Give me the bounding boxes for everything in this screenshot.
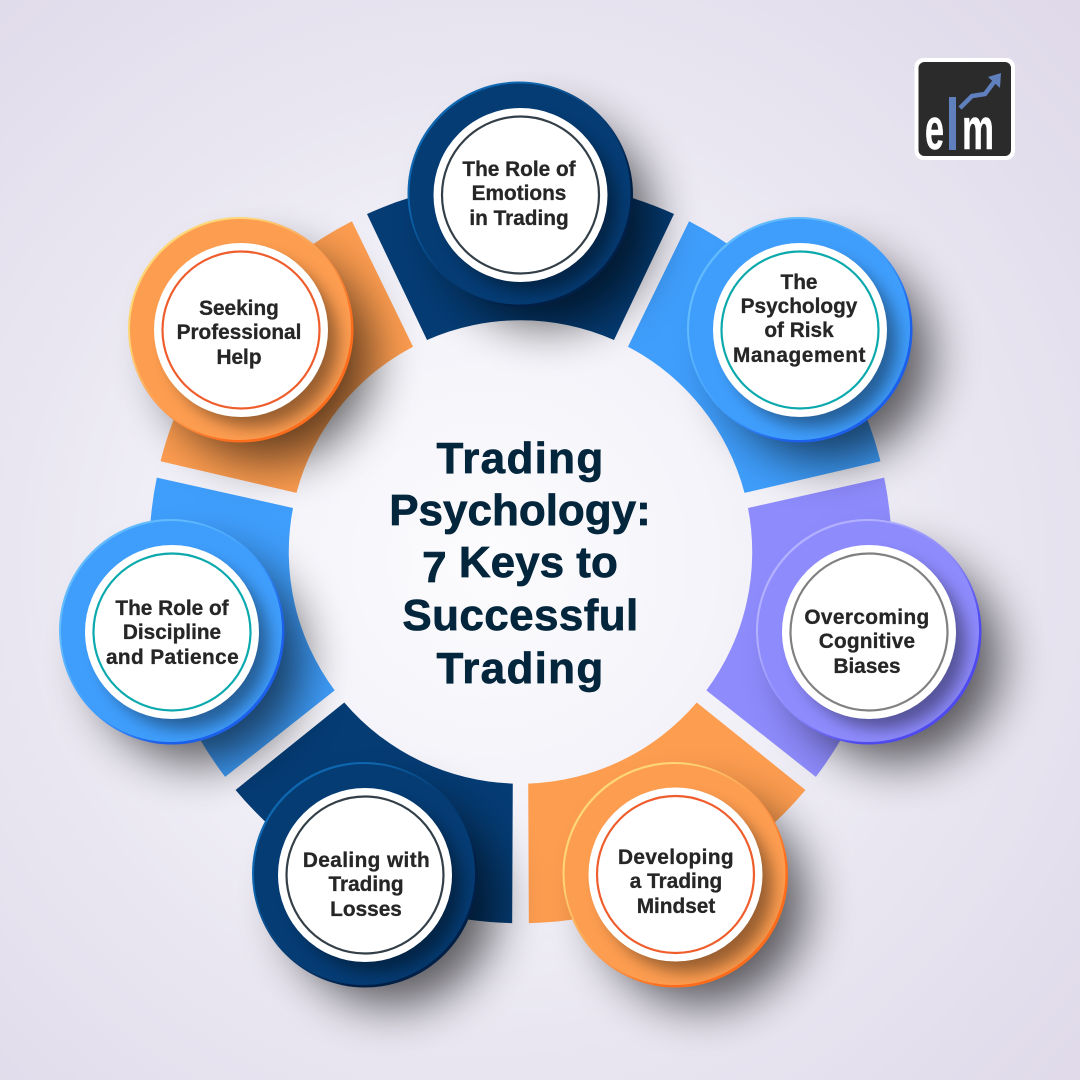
bubble: The Role of Emotions in Trading <box>408 82 633 307</box>
label: Professional <box>177 321 301 344</box>
segment: role of emotions <box>367 181 674 340</box>
label: Losses <box>330 898 402 921</box>
segment: trading losses <box>221 676 567 953</box>
title: Trading <box>436 644 604 693</box>
bubble: Overcoming Cognitive Biases <box>756 519 982 744</box>
label: a Trading <box>630 870 722 893</box>
label: Overcoming <box>804 606 930 629</box>
logo bar l <box>949 97 956 150</box>
label: Emotions <box>472 182 566 205</box>
segment: discipline and patience <box>124 450 348 784</box>
label: Psychology <box>741 295 858 318</box>
label: Trading <box>328 873 404 896</box>
label: Seeking <box>199 297 279 320</box>
label: of Risk <box>764 319 834 342</box>
label: in Trading <box>469 207 569 230</box>
segment: cognitive biases <box>693 450 917 784</box>
title: Trading <box>436 434 604 483</box>
title: Psychology: <box>389 486 651 535</box>
segment: professional help <box>135 201 450 540</box>
title: 7 <box>422 543 447 592</box>
logo letter e: e <box>925 97 944 162</box>
title: Keys to <box>447 538 618 587</box>
label: Biases <box>833 655 901 678</box>
bubble: The Psychology of Risk Management <box>687 217 912 442</box>
segmented ring <box>124 181 917 953</box>
logo: elm <box>914 58 1015 162</box>
label: Management <box>733 344 866 367</box>
label: and Patience <box>106 646 239 669</box>
bubble: Developing a Trading Mindset <box>562 762 788 988</box>
logo letter m: m <box>962 97 994 162</box>
bubble: Seeking Professional Help <box>128 217 354 442</box>
label: Mindset <box>637 895 715 918</box>
bubble shadows <box>95 117 1000 1006</box>
label: Developing <box>618 846 734 869</box>
label: The <box>781 271 817 294</box>
label: Discipline <box>123 621 221 644</box>
bubble: The Role of Discipline and Patience <box>59 519 284 744</box>
bubble: Dealing with Trading Losses <box>252 762 478 988</box>
title: Successful <box>402 591 639 640</box>
label: The Role of <box>462 158 576 181</box>
label: Cognitive <box>819 630 915 653</box>
label: The Role of <box>115 597 229 620</box>
label: Help <box>216 346 262 369</box>
logo arrow <box>960 73 1001 108</box>
label: Dealing with <box>303 849 430 872</box>
segment: trading mindset <box>474 676 820 953</box>
segment: risk management <box>591 201 906 540</box>
